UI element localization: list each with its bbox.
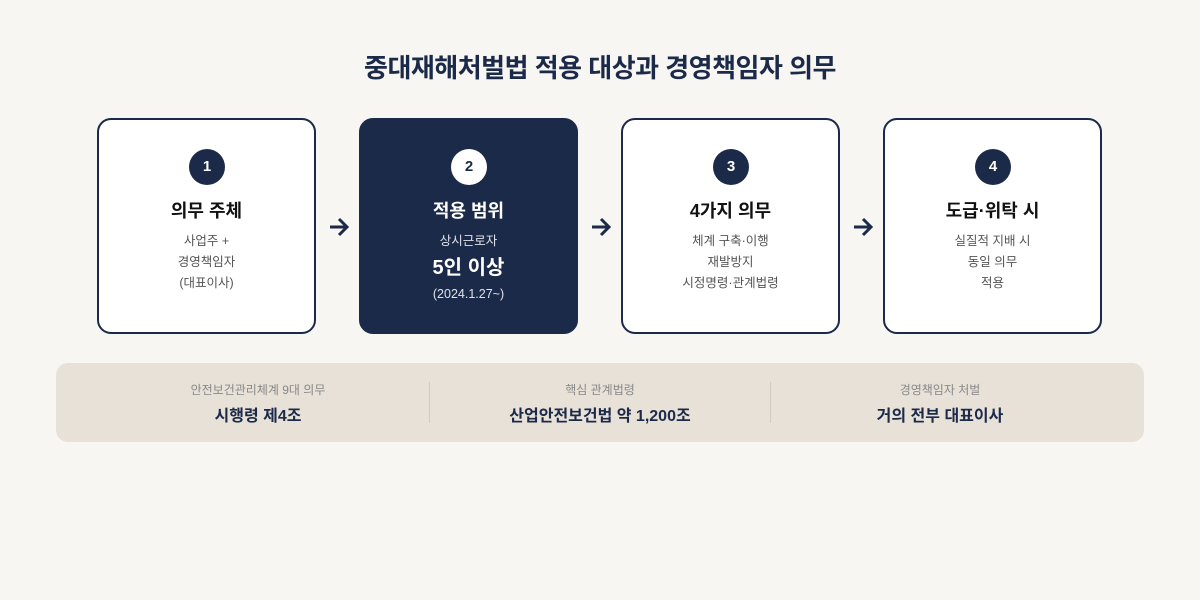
stat 2	[509, 383, 691, 425]
card body 4: 실질적 지배 시	[955, 234, 1030, 248]
card body 2	[433, 234, 504, 301]
card body 4	[955, 234, 1030, 290]
card body 1: 사업주 +	[184, 234, 229, 248]
arrow 1	[330, 218, 349, 236]
arrow 2	[592, 218, 611, 236]
stat 2: 산업안전보건법 약 1,200조	[509, 408, 691, 425]
number 1	[189, 149, 225, 185]
card body 3: 재발방지	[707, 255, 754, 269]
stat 1: 안전보건관리체계 9대 의무	[191, 383, 325, 397]
number 2	[451, 149, 487, 185]
number 1: 1	[203, 158, 211, 175]
card title 1: 의무 주체	[171, 201, 242, 221]
card 1	[97, 118, 316, 334]
card body 1: (대표이사)	[179, 276, 234, 290]
stat 2: 핵심 관계법령	[565, 383, 635, 397]
card body 4: 동일 의무	[968, 255, 1017, 269]
card body 4: 적용	[981, 276, 1004, 290]
card body 2: 상시근로자	[440, 234, 497, 248]
title: 중대재해처벌법 적용 대상과 경영책임자 의무	[364, 53, 836, 83]
card 4	[883, 118, 1102, 334]
number 3	[713, 149, 749, 185]
card body 3	[682, 234, 779, 290]
card body 1: 경영책임자	[178, 255, 235, 269]
card title 3: 4가지 의무	[690, 201, 771, 221]
card body 1	[178, 234, 235, 290]
summary panel	[56, 363, 1144, 442]
arrow 3	[854, 218, 873, 236]
stat 3	[877, 383, 1004, 425]
card body 3: 시정명령·관계법령	[682, 276, 779, 290]
number 2: 2	[465, 158, 473, 175]
card 2	[359, 118, 578, 334]
stat 1: 시행령 제4조	[215, 408, 301, 425]
number 4	[975, 149, 1011, 185]
stat 3: 경영책임자 처벌	[900, 383, 980, 397]
card body 2: 5인 이상	[433, 257, 504, 279]
card body 2: (2024.1.27~)	[433, 287, 504, 301]
card body 3: 체계 구축·이행	[692, 234, 769, 248]
number 3: 3	[727, 158, 735, 175]
stat 1	[191, 383, 325, 425]
card title 2: 적용 범위	[433, 201, 504, 221]
card title 4: 도급·위탁 시	[946, 201, 1039, 221]
number 4: 4	[989, 158, 997, 175]
card 3	[621, 118, 840, 334]
stat 3: 거의 전부 대표이사	[877, 408, 1003, 425]
